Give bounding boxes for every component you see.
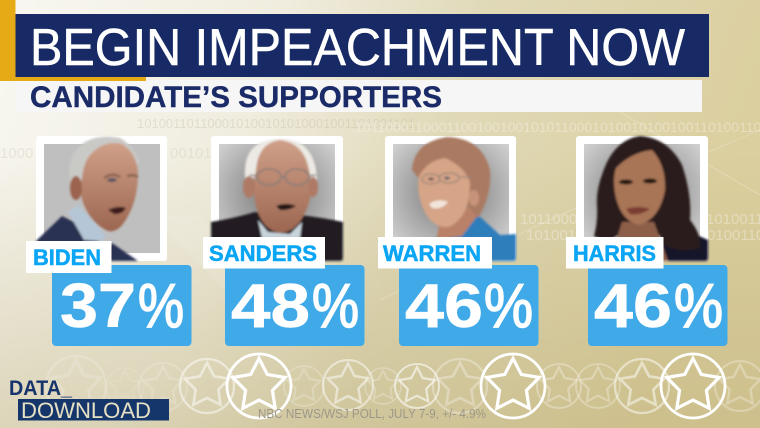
subtitle band: CANDIDATE’S SUPPORTERS bbox=[30, 81, 442, 114]
logo: Data Download bbox=[9, 377, 169, 423]
value: Harris 46%: % bbox=[674, 272, 723, 341]
label: Warren bbox=[378, 237, 492, 268]
value: Harris 46%: 46 bbox=[594, 272, 672, 341]
logo: Data Download: DOWNLOAD bbox=[21, 398, 151, 423]
value: Biden 37% bbox=[52, 265, 192, 346]
title bar: BEGIN IMPEACHMENT NOW bbox=[30, 19, 685, 77]
logo: Data Download: DATA_ bbox=[9, 377, 72, 400]
label: Sanders bbox=[203, 237, 325, 268]
subtitle band bbox=[16, 80, 702, 114]
value: Biden 37%: 37 bbox=[60, 272, 136, 341]
label: Harris: HARRIS bbox=[573, 241, 656, 266]
binary background text: 1011000 bbox=[520, 211, 577, 228]
value: Sanders 48% bbox=[225, 265, 364, 346]
value: Warren 46% bbox=[399, 265, 538, 346]
photo: Sanders bbox=[211, 136, 343, 261]
value: Warren 46%: % bbox=[484, 272, 533, 341]
binary background text: 101001101100010100101010001001101001101 bbox=[137, 116, 415, 131]
binary background text: 1010011 bbox=[526, 227, 583, 244]
photo: Biden bbox=[36, 136, 167, 261]
label: Sanders: SANDERS bbox=[209, 241, 317, 266]
label: Biden: BIDEN bbox=[33, 245, 101, 270]
label: Warren: WARREN bbox=[383, 241, 481, 266]
photo: Harris bbox=[576, 136, 708, 261]
label: Harris bbox=[566, 237, 664, 268]
value: Sanders 48%: 48 bbox=[231, 272, 310, 341]
value: Sanders 48%: % bbox=[312, 272, 359, 341]
photo: Warren bbox=[385, 136, 516, 261]
binary background text: 00101 bbox=[170, 145, 212, 162]
value: Warren 46%: 46 bbox=[405, 272, 483, 341]
value: Harris 46% bbox=[588, 265, 728, 346]
star badges row bbox=[46, 354, 760, 418]
binary background text bbox=[0, 116, 760, 244]
value: Biden 37%: % bbox=[138, 272, 184, 341]
source note: NBC NEWS/WSJ POLL, JULY 7-9, +/- 4.9% bbox=[258, 406, 486, 421]
label: Biden bbox=[26, 241, 112, 273]
gold accent bbox=[0, 0, 146, 81]
binary background text: 1000 bbox=[0, 145, 33, 162]
